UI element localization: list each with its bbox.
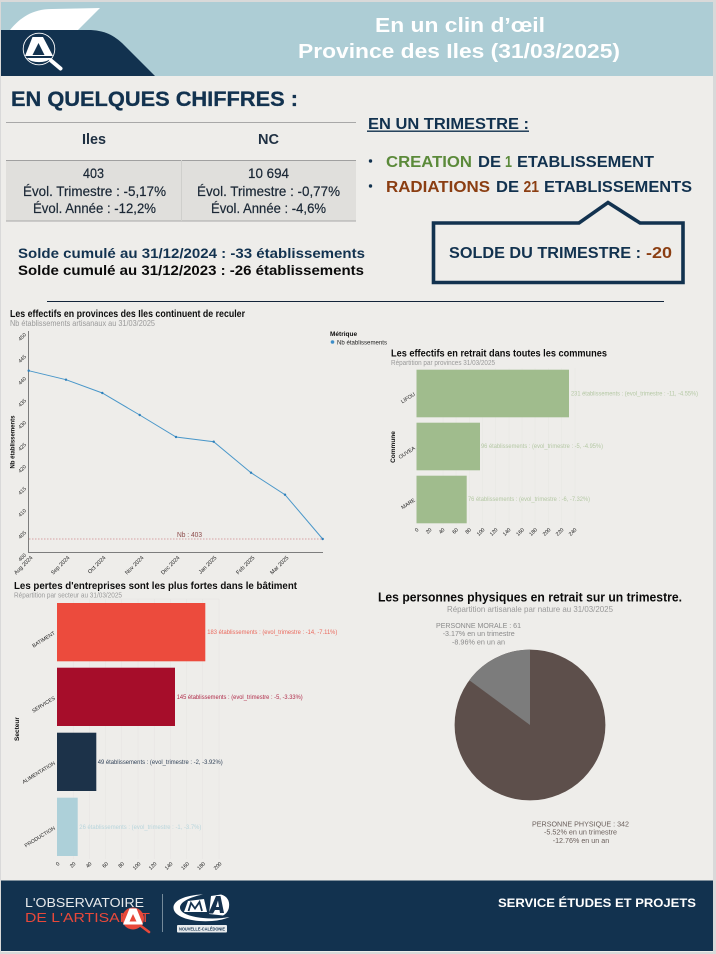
x axis labels: 0 (55, 861, 61, 868)
bar value labels: 145 établissements : (evol_trimestre : -5, -3.33%) (177, 694, 303, 701)
axis title: Secteur (14, 717, 21, 741)
label: personne morale: -3.17% en un trimestre (443, 629, 515, 638)
x axis labels: 120 (148, 861, 158, 872)
category labels: LIFOU (400, 392, 417, 405)
heading: en quelques chiffres: EN QUELQUES CHIFFRES : (11, 88, 298, 111)
chart subtitle: Nb établissements artisanaux au 31/03/2025 (10, 319, 156, 328)
column: NC: 10 694 (248, 165, 289, 181)
white swoosh (10, 8, 100, 30)
cumulative balance text: Solde cumulé au 31/12/2024 : -33 établissements (18, 246, 365, 261)
line chart: effectifs (10, 308, 387, 576)
data line (28, 370, 324, 540)
x axis labels: 140 (164, 861, 174, 872)
column: Iles: Évol. Trimestre : -5,17% (23, 183, 166, 199)
x axis labels (55, 861, 223, 872)
bullet list: quarter flows (369, 154, 692, 196)
chart title: Les personnes physiques en retrait sur un trimestre. (378, 590, 682, 604)
column: Iles: Évol. Année : -12,2% (33, 200, 156, 216)
legend (330, 331, 387, 346)
label: personne morale (436, 621, 521, 646)
category labels: BATIMENT (31, 630, 57, 649)
bullet list: quarter flows: DE (478, 154, 501, 171)
x axis labels: 240 (568, 527, 578, 538)
x axis labels: 20 (425, 527, 433, 536)
x axis labels: Jan 2025 (198, 555, 218, 576)
logo caption (177, 925, 227, 932)
bars (57, 603, 205, 856)
x axis labels: 100 (476, 527, 486, 538)
label: personne physique: PERSONNE PHYSIQUE : 342 (532, 820, 629, 828)
bar value labels: 49 établissements : (evol_trimestre : -2, -3.92%) (98, 759, 223, 766)
callout: solde du trimestre (434, 202, 683, 282)
chart title: Les effectifs en provinces des Iles continuent de reculer (10, 308, 245, 320)
x axis labels: 80 (464, 527, 473, 536)
observatoire wordmark: DE L'ARTISANAT (25, 910, 150, 925)
y axis labels: 420 (18, 464, 28, 475)
legend: Nb établissements (337, 340, 387, 346)
bar value labels: 96 établissements : (evol_trimestre : -5, -4.95%) (481, 443, 603, 450)
chart subtitle: Répartition artisanale par nature au 31/03/2025 (447, 604, 613, 614)
x axis labels: 60 (451, 527, 460, 536)
bar value labels: 183 établissements : (evol_trimestre : -14, -7.11%) (207, 629, 337, 636)
x axis labels: 140 (502, 527, 512, 538)
category labels: MARE (400, 497, 417, 511)
x axis labels: 180 (528, 527, 539, 538)
observatoire wordmark (25, 895, 150, 925)
x axis labels: 160 (515, 527, 526, 538)
x axis labels: 20 (69, 861, 77, 870)
category labels: SERVICES (31, 695, 57, 715)
axes (28, 331, 323, 552)
y axis labels (18, 332, 28, 563)
bar value labels: 76 établissements : (evol_trimestre : -6, -7.32%) (468, 496, 590, 503)
axis title: Commune (390, 431, 397, 463)
column: NC: Évol. Trimestre : -0,77% (197, 183, 340, 199)
y axis title: Nb établissements (10, 415, 16, 469)
x axis labels: 40 (438, 527, 446, 536)
x axis labels: 100 (132, 861, 142, 872)
column: Iles (23, 165, 166, 216)
y axis labels: 440 (18, 376, 28, 387)
category labels: OUVEA (398, 445, 417, 461)
x axis labels: 0 (414, 527, 420, 534)
x axis labels: 40 (85, 861, 93, 870)
CMA logo: NOUVELLE-CALÉDONIE (179, 925, 226, 933)
cumulative balance text: Solde cumulé au 31/12/2023 : -26 établissements (18, 263, 364, 278)
x axis labels: Oct 2024 (87, 555, 107, 575)
bar value labels (79, 629, 337, 831)
icon: red magnifier (122, 908, 149, 932)
icon: magnifier logo (23, 33, 60, 68)
column headings (82, 132, 280, 148)
y axis labels: 410 (18, 508, 28, 519)
y axis labels: 425 (18, 442, 28, 453)
x axis labels: Sep 2024 (50, 555, 71, 576)
legend: Métrique (330, 331, 357, 338)
x axis labels: 200 (213, 861, 223, 872)
x axis labels: 180 (196, 861, 207, 872)
column: Iles: 403 (83, 165, 104, 181)
bullet list: quarter flows: DE (496, 179, 519, 196)
chart subtitle: Répartition par provinces 31/03/2025 (391, 360, 495, 367)
category labels: PRODUCTION (24, 825, 57, 849)
bullet list: quarter flows: 1 (505, 154, 512, 171)
chart title: Les effectifs en retrait dans toutes les communes (391, 348, 607, 360)
label: personne physique (532, 820, 629, 845)
column: NC: Évol. Année : -4,6% (211, 200, 326, 216)
title: En un clin d’œil (375, 14, 545, 37)
x axis labels (13, 555, 290, 576)
callout: solde du trimestre: SOLDE DU TRIMESTRE : (449, 245, 641, 262)
x axis labels: Dec 2024 (160, 555, 181, 576)
heading: en un trimestre: EN UN TRIMESTRE : (368, 116, 529, 133)
x axis labels: Mar 2025 (269, 555, 290, 576)
x axis labels: 80 (117, 861, 126, 870)
column: NC (197, 165, 340, 216)
pie chart: nature (378, 590, 682, 845)
y axis labels: 450 (18, 332, 28, 343)
bullet list: quarter flows: ETABLISSEMENTS (544, 179, 692, 196)
label: personne morale: PERSONNE MORALE : 61 (436, 621, 521, 630)
y axis labels: 430 (18, 420, 28, 431)
category labels (398, 392, 417, 511)
y axis labels: 405 (18, 530, 28, 541)
bar chart: communes (390, 348, 698, 538)
column headings: NC (258, 132, 280, 148)
reference line: Nb 403: Nb : 403 (177, 530, 202, 539)
bullet list: quarter flows: RADIATIONS (386, 179, 490, 196)
chart title: Les pertes d'entreprises sont les plus fortes dans le bâtiment (14, 580, 297, 592)
x axis labels: 220 (555, 527, 565, 538)
bar chart: secteurs (14, 580, 337, 872)
header banner (1, 2, 713, 76)
bullet list: quarter flows: CREATION (386, 154, 472, 171)
CMA logo (173, 894, 230, 933)
title: Province des Iles (31/03/2025) (298, 40, 620, 63)
chart subtitle: Répartition par secteur au 31/03/2025 (14, 590, 122, 600)
y axis labels: 400 (18, 553, 28, 563)
observatoire wordmark: L'OBSERVATOIRE (25, 895, 144, 910)
x axis labels: 160 (180, 861, 191, 872)
footer band (1, 880, 713, 951)
y axis labels: 435 (18, 398, 28, 409)
category labels (22, 630, 57, 849)
column headings: Iles (82, 132, 106, 148)
x axis labels: 200 (542, 527, 552, 538)
y axis labels: 445 (18, 354, 28, 365)
cumulative balance text (18, 246, 365, 278)
category labels: ALIMENTATION (22, 760, 57, 786)
x axis labels: 120 (489, 527, 499, 538)
x axis labels: Feb 2025 (235, 555, 256, 576)
bars (416, 370, 569, 523)
x axis labels (414, 527, 578, 538)
x axis labels: 60 (101, 861, 110, 870)
navy tab (1, 30, 155, 76)
table: key figures (6, 122, 356, 221)
x axis labels: Nov 2024 (124, 555, 145, 576)
label: personne physique: -12.76% en un an (553, 836, 609, 845)
bar value labels: 26 établissements : (evol_trimestre : -1, -3.7%) (79, 824, 201, 831)
title (298, 14, 620, 63)
label: personne physique: -5.52% en un trimestre (544, 828, 617, 836)
pie slices (455, 650, 605, 800)
x axis labels: Aug 2024 (13, 555, 34, 576)
bullet list: quarter flows: 21 (524, 179, 539, 196)
label: personne morale: -8.96% en un an (452, 637, 505, 646)
bar value labels (468, 390, 698, 503)
callout: solde du trimestre: -20 (646, 245, 672, 262)
service label: SERVICE ÉTUDES ET PROJETS (498, 895, 696, 910)
bullet list: quarter flows: ETABLISSEMENT (517, 154, 654, 171)
y axis labels: 415 (18, 486, 28, 497)
bar value labels: 231 établissements : (evol_trimestre : -11, -4.55%) (571, 390, 698, 398)
